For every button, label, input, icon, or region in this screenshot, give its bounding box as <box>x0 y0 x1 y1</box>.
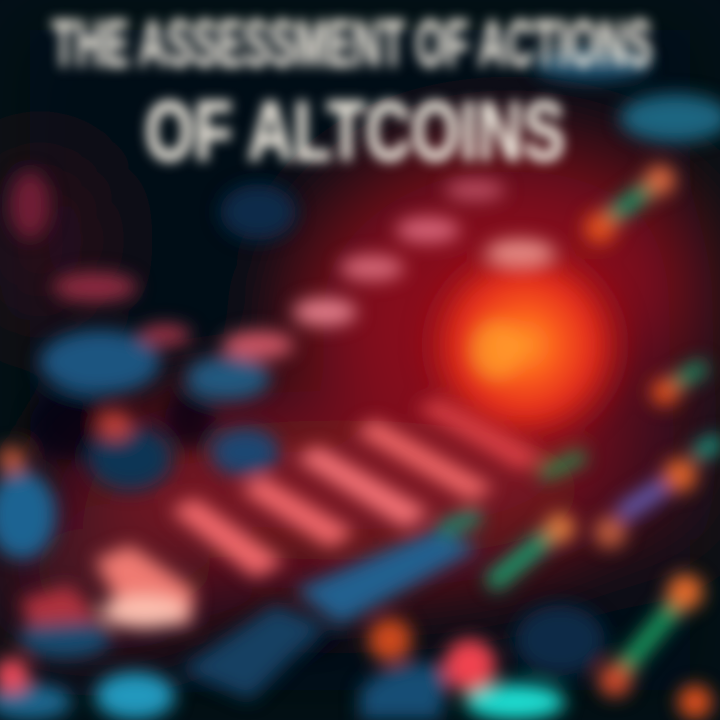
blue bottom ribbon <box>0 530 605 720</box>
glowing orange core <box>421 246 634 458</box>
title <box>52 6 652 178</box>
dark shadows <box>30 390 340 654</box>
red helix rungs <box>20 400 545 628</box>
title: OF ALTCOINS <box>145 84 565 178</box>
pink upper strand <box>10 171 554 439</box>
green and orange strands <box>0 165 720 719</box>
